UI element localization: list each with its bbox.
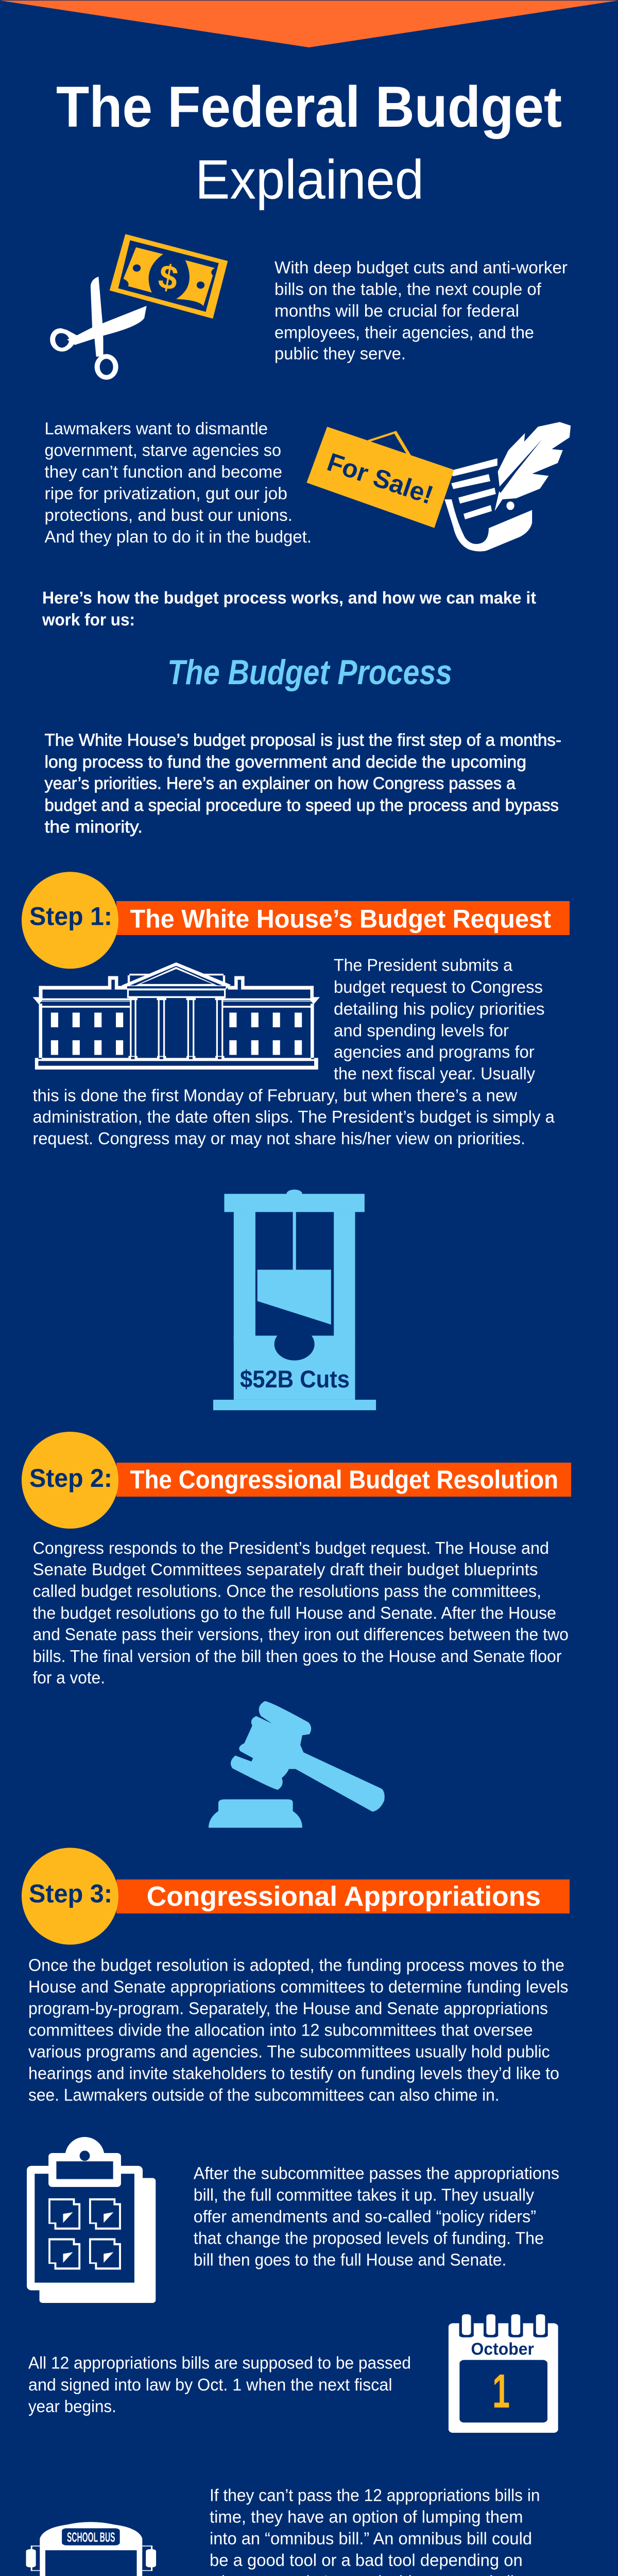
intro paragraph: year’s priorities. Here’s an explainer on how Congress passes a [44,774,516,793]
intro text: lawmakers want to dismantle: protections, and bust our unions. [44,506,293,525]
step 3 text: program-by-program. Separately, the House and Senate appropriations [28,1999,548,2019]
icon: school bus [26,2522,179,2576]
lead-in text: work for us: [42,611,135,630]
step 1 text: request. Congress may or may not share his/her view on priorities. [33,1129,525,1148]
step 3 text [28,1956,569,2105]
title: Explained [195,148,424,210]
step 2 heading: The Congressional Budget Resolution [130,1465,558,1494]
icon: for sale sign with scroll and quill: For Sale! [323,447,437,510]
step 3 text: Once the budget resolution is adopted, the funding process moves to the [28,1956,564,1975]
step 2 text: called budget resolutions. Once the resolutions pass the committees, [33,1582,541,1601]
step 1 heading: Step 1: [29,902,112,930]
step 1 text: administration, the date often slips. The President’s budget is simply a [33,1108,555,1127]
icon: scissors cutting money: $ [156,257,181,298]
intro text: with deep budget cuts: bills on the table, the next couple of [274,280,542,299]
step 3 text: House and Senate appropriations committees to determine funding levels [28,1978,569,1997]
intro text: with deep budget cuts: employees, their agencies, and the [274,323,534,342]
step 1 heading: The White House’s Budget Request [130,904,551,933]
step 2 text: bills. The final version of the bill then goes to the House and Senate floor [33,1647,561,1666]
intro text: with deep budget cuts: months will be crucial for federal [274,301,519,320]
intro paragraph: The White House’s budget proposal is just the first step of a months- [44,731,561,750]
step 1 text: and spending levels for [334,1021,509,1040]
intro paragraph: the minority. [44,818,143,837]
step 3 text: hearings and invite stakeholders to testify on funding levels they’d like to [28,2064,559,2083]
text: omnibus bill: time, they have an option of lumping them [210,2508,523,2527]
step 2 text [33,1539,569,1687]
icon: calendar october 1: 1 [492,2364,510,2418]
step 1 text: The President submits a [334,956,512,975]
text: full committee: offer amendments and so-called “policy riders” [194,2208,536,2227]
title: The Federal Budget [56,75,562,139]
step 1 text: agencies and programs for [334,1043,535,1062]
text: full committee [194,2164,559,2269]
text: 12 bills by Oct. 1: year begins. [28,2397,116,2416]
title [56,75,562,210]
text: omnibus bill: If they can’t pass the 12 appropriations bills in [210,2486,540,2505]
text: full committee: bill, the full committee takes it up. They usually [194,2185,534,2205]
intro text: with deep budget cuts: public they serve. [274,345,406,364]
heading: the budget process: The Budget Process [167,653,452,692]
panel: step 1 [22,872,570,1410]
intro text: lawmakers want to dismantle: government, starve agencies so [44,441,281,460]
step 1 text: detailing his policy priorities [334,999,545,1019]
intro text: with deep budget cuts [274,259,568,364]
intro text: lawmakers want to dismantle [44,419,312,547]
step 2 text: the budget resolutions go to the full House and Senate. After the House [33,1604,556,1623]
icon part: dollar bill [110,234,228,318]
intro text: lawmakers want to dismantle: ripe for privatization, gut our job [44,484,287,503]
icon: for sale sign with scroll and quill [306,422,571,551]
lead-in text: Here’s how the budget process works, and how we can make it [42,588,536,608]
icon part: scissors [50,277,147,380]
icon: gavel [209,1701,385,1828]
text: omnibus bill [209,2486,554,2576]
icon part: scroll [444,459,532,551]
icon: clipboard [27,2137,156,2303]
icon part: sign [306,427,454,528]
intro text: lawmakers want to dismantle: they can’t function and become [44,463,282,482]
step 2 heading: Step 2: [29,1464,112,1493]
lead-in text [42,588,536,630]
step 2 text: for a vote. [33,1668,105,1687]
step 1 text: budget request to Congress [334,978,543,997]
text: omnibus bill: into an “omnibus bill.” An omnibus bill could [210,2529,532,2548]
intro text: lawmakers want to dismantle: Lawmakers want to dismantle [44,419,268,438]
step 3 text: committees divide the allocation into 12 subcommittees that oversee [28,2021,533,2040]
text: 12 bills by Oct. 1 [28,2354,411,2416]
step 3 heading: Congressional Appropriations [147,1881,541,1912]
step 2 heading [22,1432,571,1529]
text: full committee: that change the proposed levels of funding. The [194,2229,544,2248]
step 2 text: Congress responds to the President’s budget request. The House and [33,1539,549,1558]
icon: guillotine with $52B cuts: $52B Cuts [240,1365,350,1393]
text: 12 bills by Oct. 1: and signed into law by Oct. 1 when the next fiscal [28,2376,392,2395]
intro paragraph [44,731,561,837]
icon: guillotine with $52B cuts [213,1190,376,1410]
step 2 text: and Senate pass their versions, they iron out differences between the two [33,1625,569,1645]
icon: scissors cutting money [50,234,228,380]
step 3 heading: Step 3: [29,1879,112,1908]
intro paragraph: long process to fund the government and decide the upcoming [44,753,526,772]
top orange chevron [0,1,618,47]
panel: step 2 [22,1432,571,1828]
panel: step 3 [22,1848,570,2576]
icon: calendar october 1 [449,2314,558,2433]
step 1 text [33,956,555,1148]
icon: school bus: SCHOOL BUS [67,2529,115,2545]
step 1 heading [22,872,570,969]
step 1 text: this is done the first Monday of February, but when there’s a new [33,1086,518,1105]
icon part: feather [494,422,571,511]
text: 12 bills by Oct. 1: All 12 appropriations bills are supposed to be passed [28,2354,411,2373]
text: omnibus bill: be a good tool or a bad tool depending on [210,2551,523,2570]
intro text: lawmakers want to dismantle: And they plan to do it in the budget. [44,528,312,547]
text: full committee: After the subcommittee passes the appropriations [194,2164,559,2183]
intro paragraph: budget and a special procedure to speed up the process and bypass [44,796,559,815]
step 2 text: Senate Budget Committees separately draft their budget blueprints [33,1561,538,1580]
icon: white house [33,962,320,1070]
step 3 text: various programs and agencies. The subcommittees usually hold public [28,2042,550,2061]
text: full committee: bill then goes to the full House and Senate. [194,2250,506,2269]
step 3 heading [22,1848,570,1944]
icon: calendar october 1: October [471,2340,534,2359]
intro text: with deep budget cuts: With deep budget cuts and anti-worker [274,259,568,278]
step 1 text: the next fiscal year. Usually [334,1064,535,1083]
step 3 text: see. Lawmakers outside of the subcommittees can also chime in. [28,2086,500,2105]
